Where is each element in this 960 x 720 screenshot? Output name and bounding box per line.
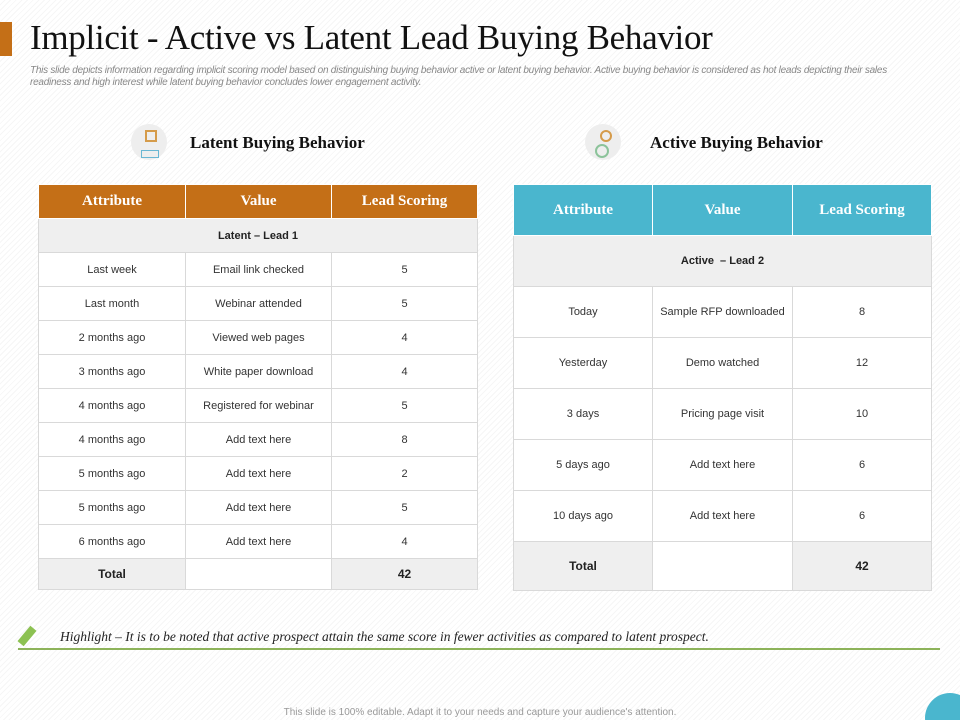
table: active: 3 days (567, 408, 599, 420)
table: latent: Total (98, 567, 126, 581)
table: active: Add text here (690, 459, 755, 471)
table: latent: Add text here (226, 502, 291, 514)
table: latent: Value (240, 193, 277, 209)
table: latent: Latent – Lead 1 (218, 230, 298, 242)
table: latent: Viewed web pages (212, 332, 305, 344)
table: latent: 5 months ago (79, 502, 145, 514)
table: latent: White paper download (204, 366, 313, 378)
table: active: 5 days ago (556, 459, 610, 471)
table: latent: 3 months ago (79, 366, 145, 378)
table: latent: 42 (398, 567, 411, 581)
table: latent: 5 (401, 502, 408, 514)
title: Implicit - Active vs Latent Lead Buying Behavior (30, 18, 713, 57)
table: latent: Add text here (226, 468, 291, 480)
table: latent: 4 (401, 536, 408, 548)
table: latent: 5 (401, 298, 408, 310)
table: latent: Last month (85, 298, 139, 310)
table: active: Value (704, 202, 741, 218)
table: latent: Attribute (82, 193, 142, 209)
table: active: 8 (859, 306, 865, 318)
table: latent: Add text here (226, 434, 291, 446)
table: active: Active – Lead 2 (681, 255, 764, 267)
table: latent: 8 (401, 434, 408, 446)
table: active: Attribute (553, 202, 613, 218)
highlight underline (18, 648, 940, 650)
table: latent: 4 months ago (79, 434, 145, 446)
table: active: 42 (855, 559, 869, 573)
icon: active (585, 124, 621, 160)
table: latent (38, 184, 478, 590)
description: This slide depicts information regarding implicit scoring model based on distinguishing buying behavior active or latent buying behavior. Active buying behavior is considered as hot leads depicting their sales readiness and high interest while latent buying behavior concludes lower engagement activity. (30, 65, 887, 88)
table: latent: Webinar attended (215, 298, 302, 310)
table: latent: 5 months ago (79, 468, 145, 480)
table: latent: 2 (401, 468, 408, 480)
table: active: Sample RFP downloaded (660, 306, 785, 318)
table: latent: Last week (87, 264, 137, 276)
table: active: 12 (856, 357, 868, 369)
table: active: Add text here (690, 510, 755, 522)
table: latent: 5 (401, 400, 408, 412)
table: active (513, 184, 932, 591)
table: latent: 5 (401, 264, 408, 276)
table: active: Today (568, 306, 598, 318)
heading: active: Active Buying Behavior (650, 133, 823, 152)
table: latent: 4 (401, 366, 408, 378)
table: active: 6 (859, 510, 865, 522)
table: latent: 6 months ago (79, 536, 145, 548)
table: latent: Lead Scoring (362, 193, 447, 209)
table: latent: Registered for webinar (203, 400, 314, 412)
table: latent: Email link checked (213, 264, 304, 276)
table: active: Pricing page visit (681, 408, 764, 420)
table: active: 10 days ago (553, 510, 613, 522)
title accent bar (0, 22, 12, 56)
table: latent: 4 (401, 332, 408, 344)
table: active: 10 (856, 408, 868, 420)
highlight text: Highlight – It is to be noted that active prospect attain the same score in fewer activities as compared to latent prospect. (60, 629, 709, 644)
heading: latent: Latent Buying Behavior (190, 133, 365, 152)
table: active: Lead Scoring (819, 202, 905, 218)
icon: latent (131, 124, 167, 160)
table: active: Total (569, 559, 597, 573)
table: active: Yesterday (559, 357, 607, 369)
table: active: Demo watched (686, 357, 759, 369)
table: active: 6 (859, 459, 865, 471)
table: latent: 4 months ago (79, 400, 145, 412)
table: latent: Add text here (226, 536, 291, 548)
table: latent: 2 months ago (79, 332, 145, 344)
footer: This slide is 100% editable. Adapt it to your needs and capture your audience's attention. (284, 707, 676, 718)
corner circle (925, 693, 960, 720)
icon: pencil (18, 626, 36, 646)
